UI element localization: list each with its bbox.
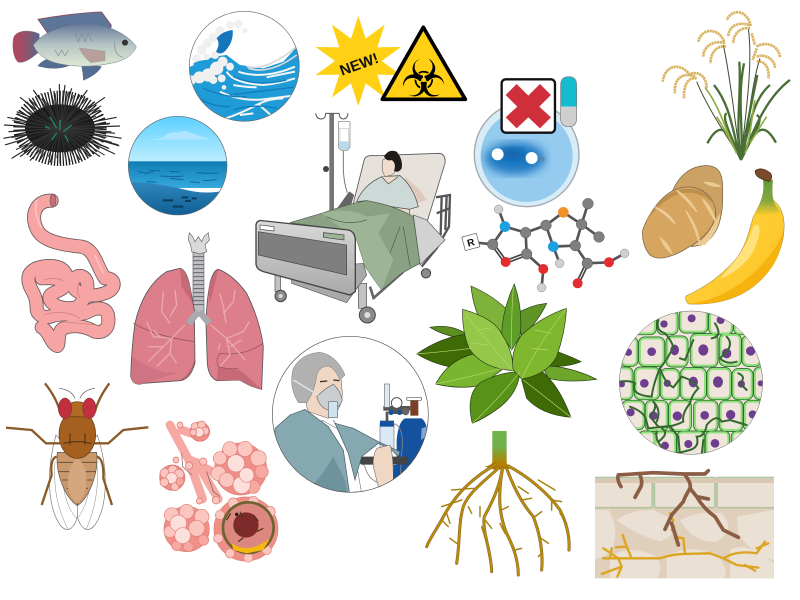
illustration: new badge — [316, 16, 401, 106]
leaf veins — [417, 287, 571, 423]
fly legs — [6, 383, 148, 505]
cell wall outlines — [620, 311, 762, 454]
lower leaf right — [522, 370, 571, 417]
illustration: fruit fly — [6, 383, 148, 530]
banana tip — [755, 169, 772, 182]
back leaf top right — [517, 303, 547, 337]
illustration: ocean circle — [128, 116, 227, 217]
neck and face — [306, 364, 342, 418]
oxygen tank — [396, 418, 427, 474]
banana body — [686, 180, 784, 304]
illustration: lungs and trachea — [131, 233, 263, 389]
upper alveolar cluster — [211, 441, 268, 495]
coat right panel — [335, 423, 400, 480]
back leaf top — [471, 286, 513, 347]
fish dorsal fin — [38, 12, 111, 37]
illustration: alveoli — [160, 421, 278, 562]
warning triangle — [382, 27, 465, 99]
rice light leaves — [705, 87, 767, 153]
molecule bonds — [477, 204, 625, 288]
illustration: patient with oxygen mask — [272, 336, 428, 497]
cell walls — [620, 311, 762, 454]
back leaf far right — [542, 365, 597, 381]
footboard panel — [258, 232, 347, 275]
urchin green highlights — [45, 117, 72, 142]
bronchiole tree — [170, 425, 218, 499]
front leaf right — [513, 308, 567, 379]
icon: biohazard warning — [382, 27, 465, 109]
illustration: penicillin molecule — [462, 198, 629, 292]
petri dish — [474, 102, 579, 207]
oxygen atoms — [501, 257, 614, 288]
fish shoal — [163, 197, 197, 207]
rice stems — [697, 28, 760, 160]
fish pectoral fin — [79, 48, 105, 63]
bedside control — [337, 192, 354, 209]
lower alveolar cluster — [164, 504, 209, 552]
far side rail — [422, 195, 450, 267]
fly head — [62, 402, 92, 417]
cloud — [150, 131, 210, 140]
oxygen mask — [317, 384, 342, 411]
sky — [128, 116, 227, 162]
wave water body — [190, 48, 299, 121]
wave white streaks — [220, 67, 298, 119]
banana highlight — [720, 225, 760, 279]
sheet — [413, 215, 445, 265]
R group label: R — [466, 237, 476, 250]
illustration: petri dish with rejected capsule — [474, 77, 579, 207]
fly thorax — [59, 410, 96, 458]
root stem — [485, 431, 513, 470]
patient torso — [357, 176, 418, 209]
tissue background — [595, 477, 774, 578]
illustration: rice plant — [663, 12, 790, 160]
brown fungus network — [618, 471, 738, 545]
front potato — [642, 187, 716, 258]
star burst — [316, 16, 401, 106]
lower leaf left — [470, 372, 520, 423]
capsule — [561, 77, 577, 107]
intestine tube — [28, 201, 114, 346]
hydrogen atoms — [494, 205, 629, 292]
fly abdomen — [57, 452, 97, 506]
sulfur atom — [558, 207, 569, 218]
tank valve — [383, 397, 422, 416]
back potato — [672, 166, 723, 247]
illustration: patient in hospital bed — [256, 113, 450, 323]
illustration: plant roots — [427, 431, 569, 575]
hair — [292, 352, 345, 403]
illustration: sea urchin — [3, 84, 122, 164]
bed legs and wheels — [275, 263, 431, 323]
back leaf dark right — [548, 348, 581, 366]
IV pole — [316, 113, 348, 212]
right bronchial tree — [211, 290, 249, 367]
carbon atoms — [487, 198, 604, 269]
hand — [373, 445, 393, 487]
fungal hyphae — [620, 320, 747, 455]
root main branches — [427, 465, 569, 575]
fish eye — [122, 40, 128, 46]
nitrogen atoms — [500, 221, 559, 252]
illustration: plant leaves — [417, 284, 597, 423]
wave curl — [216, 30, 233, 53]
biohazard symbol: ☣ — [400, 49, 447, 109]
flow meter and humidifier — [380, 384, 394, 450]
illustration: small intestine — [28, 194, 114, 346]
badge text: NEW! — [338, 50, 381, 80]
yellow fungus network — [602, 513, 768, 577]
left lung — [131, 268, 195, 384]
red cross — [506, 84, 551, 128]
illustration: plant cells with fungal hyphae — [613, 310, 768, 456]
sea surface — [128, 161, 227, 188]
left alveolar cluster — [160, 465, 185, 491]
illustration: root tissue with mycorrhizal fungi — [592, 471, 778, 580]
banana stem — [754, 180, 781, 215]
illustration: potato — [642, 166, 723, 258]
footboard — [256, 221, 355, 295]
wave foam — [187, 20, 248, 90]
left bronchial tree — [147, 290, 185, 367]
illustration: fish — [13, 12, 136, 80]
blanket — [290, 201, 420, 290]
middle leaf left — [436, 354, 502, 387]
intestine opening — [50, 194, 56, 207]
backrest — [353, 153, 445, 223]
fish lower fins — [38, 58, 102, 80]
coat left panel — [275, 409, 350, 497]
trachea rings — [193, 253, 204, 313]
back leaf left thin — [430, 326, 468, 338]
dissected alveolus — [214, 496, 278, 562]
small alveolar cluster — [173, 421, 220, 504]
back leaf dark left — [417, 334, 478, 367]
fly wings — [49, 435, 105, 529]
patient hair — [384, 151, 402, 172]
rice grain panicles — [663, 12, 780, 98]
armrest — [360, 457, 408, 465]
larynx — [188, 233, 209, 254]
oxygen tube — [333, 420, 402, 483]
shirt — [322, 420, 362, 493]
fish tail — [13, 31, 39, 62]
front leaf center upright — [502, 284, 521, 350]
right lung — [206, 269, 263, 389]
patient arm — [392, 207, 409, 215]
rice dark leaves — [707, 62, 790, 160]
cross box — [502, 79, 555, 133]
main bronchi — [188, 312, 209, 323]
intestine outline — [28, 201, 114, 346]
footboard handles — [260, 225, 274, 231]
tissue inner cells — [595, 510, 774, 580]
illustration: banana — [686, 169, 784, 304]
deep sea — [132, 182, 220, 215]
root side branches — [442, 480, 567, 557]
fly eyes — [58, 398, 72, 419]
fish body — [33, 24, 136, 66]
patient head — [382, 158, 397, 177]
IV bag — [338, 122, 350, 193]
epidermal cells — [592, 478, 778, 508]
front leaf left — [463, 309, 513, 371]
antibiotic discs — [492, 148, 504, 160]
R group label — [462, 233, 480, 251]
illustration: great wave circle — [187, 11, 303, 127]
cell nuclei — [618, 314, 764, 450]
fly antennae — [59, 388, 95, 398]
